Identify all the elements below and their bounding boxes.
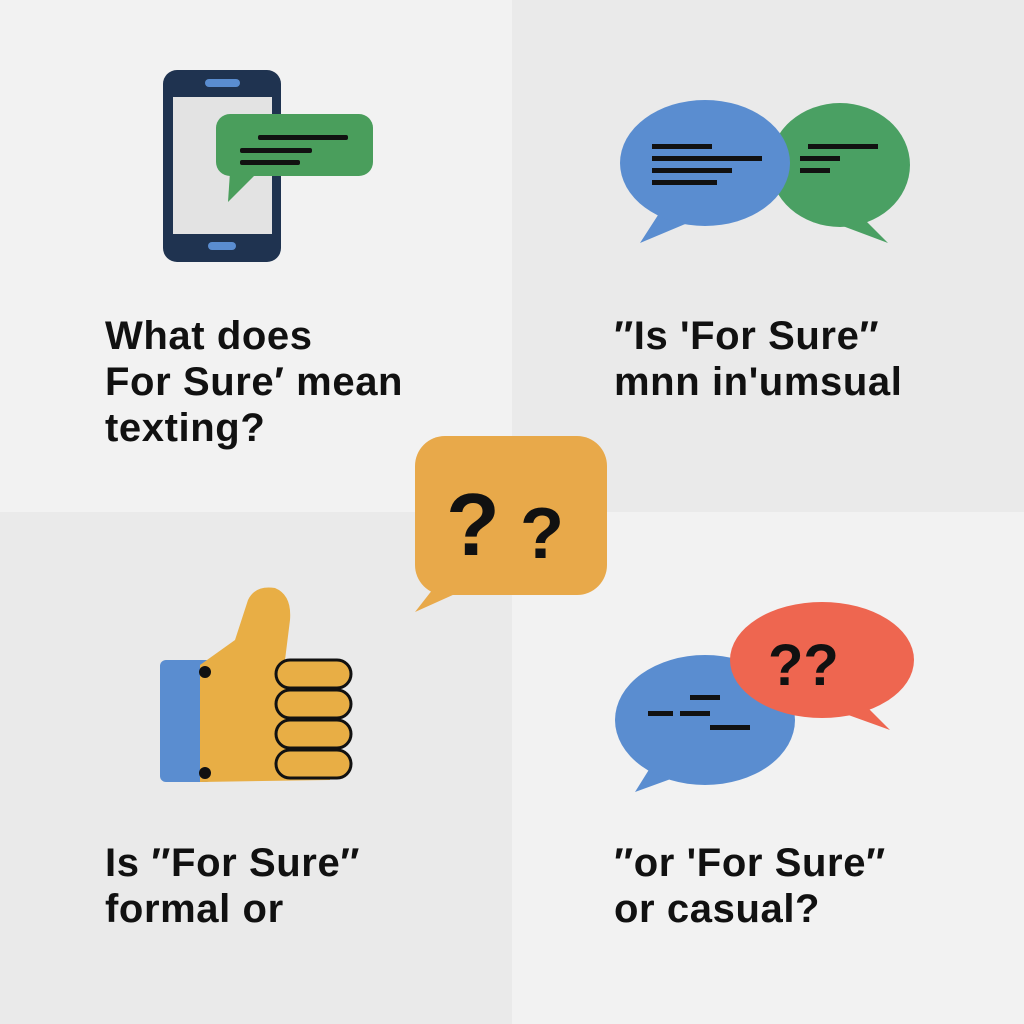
icon: bubbles with question marks: ?? [768,633,839,698]
text: top-right question: ″Is 'For Sure″ [614,314,879,358]
text: top-left question [105,314,403,450]
text: top-right question [614,314,902,404]
text: bottom-right question: ″or 'For Sure″ [614,841,886,885]
text: top-left question: texting? [105,406,265,450]
icon: central question bubble: ? [446,475,500,574]
text: bottom-left question: Is ″For Sure″ [105,841,360,885]
icon: phone with message [163,70,373,262]
icon: central question bubble [415,436,607,612]
icon: central question bubble: ? [520,494,564,574]
icon: two speech bubbles [620,100,910,243]
text: top-right question: mnn in'umsual [614,360,902,404]
icon: thumbs up [160,588,351,782]
text: bottom-left question [105,841,360,931]
icon: bubbles with question marks [615,602,914,792]
text: top-left question: For Sure′ mean [105,360,403,404]
text: top-left question: What does [105,314,313,358]
text: bottom-right question [614,841,886,931]
text: bottom-left question: formal or [105,887,284,931]
text: bottom-right question: or casual? [614,887,820,931]
